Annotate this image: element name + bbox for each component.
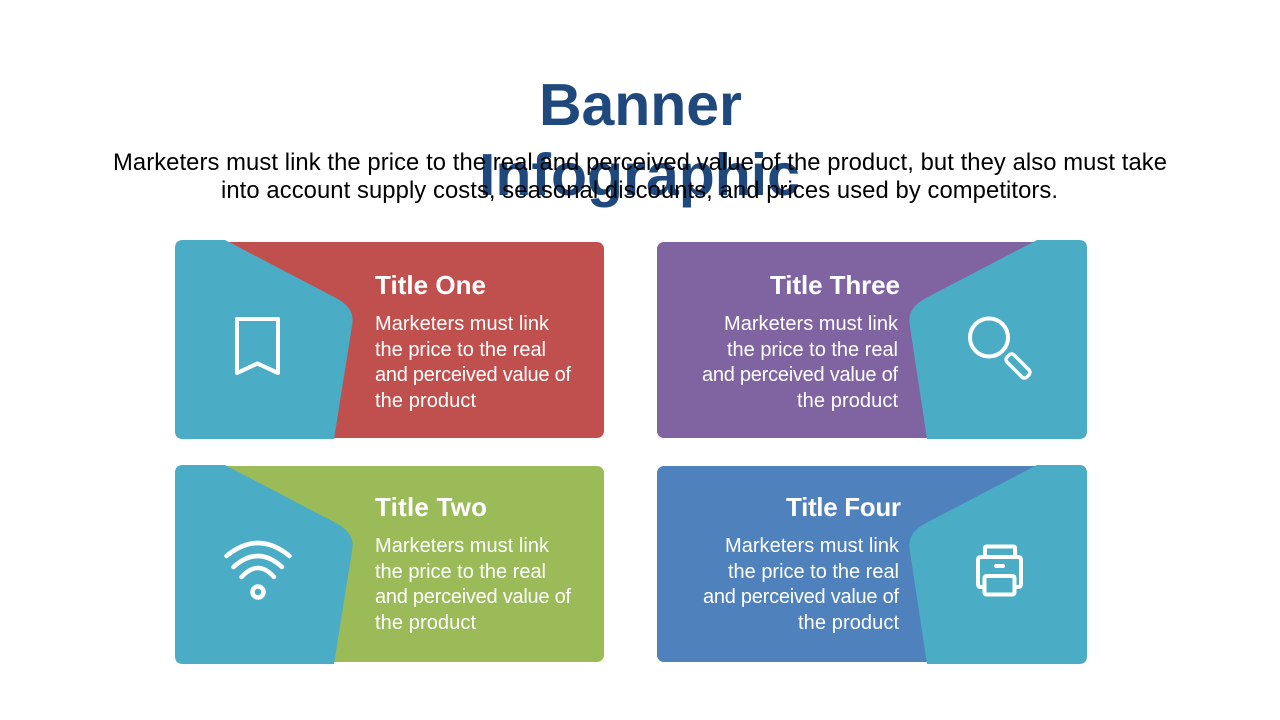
title: Infographic — [479, 142, 800, 208]
panel: title four — [657, 465, 1087, 664]
icon: magnifier — [970, 318, 1031, 379]
card background: blue — [657, 466, 1086, 662]
text block: title three: the price to the real — [727, 339, 898, 361]
teal banner shape — [175, 465, 353, 664]
title: Banner — [539, 72, 742, 138]
text block: title two: the price to the real — [375, 561, 546, 583]
text block: title two — [375, 535, 571, 634]
card background: red — [175, 242, 604, 438]
teal banner shape — [175, 240, 353, 439]
teal banner shape — [909, 240, 1087, 439]
text block: title one: the price to the real — [375, 339, 546, 361]
icon: printer — [978, 546, 1021, 594]
heading: title one: Title One — [375, 270, 486, 300]
text block: title four: and perceived value of — [703, 586, 899, 608]
card background: green — [175, 466, 604, 662]
intro paragraph: Marketers must link the price to the real and perceived value of the product, but they also must take — [113, 149, 1167, 176]
text block: title one — [375, 313, 571, 412]
icon: wifi — [226, 543, 290, 598]
card background: purple — [657, 242, 1086, 438]
text block: title four: the product — [798, 612, 899, 634]
heading: title two: Title Two — [375, 492, 487, 522]
text block: title two: the product — [375, 612, 476, 634]
intro paragraph — [113, 149, 1167, 204]
text block: title three — [702, 313, 899, 412]
text block: title two: Marketers must link — [375, 535, 550, 557]
text block: title one: the product — [375, 390, 476, 412]
panel: title three — [657, 240, 1087, 439]
text block: title four: Marketers must link — [725, 535, 900, 557]
title — [479, 72, 800, 208]
heading: title four: Title Four — [786, 492, 901, 522]
panel: title two — [175, 465, 604, 664]
text block: title two: and perceived value of — [375, 586, 571, 608]
teal banner shape — [909, 465, 1087, 664]
text block: title four — [703, 535, 900, 634]
icon: bookmark — [237, 319, 278, 373]
text block: title one: and perceived value of — [375, 364, 571, 386]
text block: title three: Marketers must link — [724, 313, 899, 335]
text block: title three: the product — [797, 390, 898, 412]
text block: title four: the price to the real — [728, 561, 899, 583]
heading: title three: Title Three — [770, 270, 900, 300]
text block: title three: and perceived value of — [702, 364, 898, 386]
text block: title one: Marketers must link — [375, 313, 550, 335]
intro paragraph: into account supply costs, seasonal discounts, and prices used by competitors. — [221, 177, 1058, 204]
panel: title one — [175, 240, 604, 439]
